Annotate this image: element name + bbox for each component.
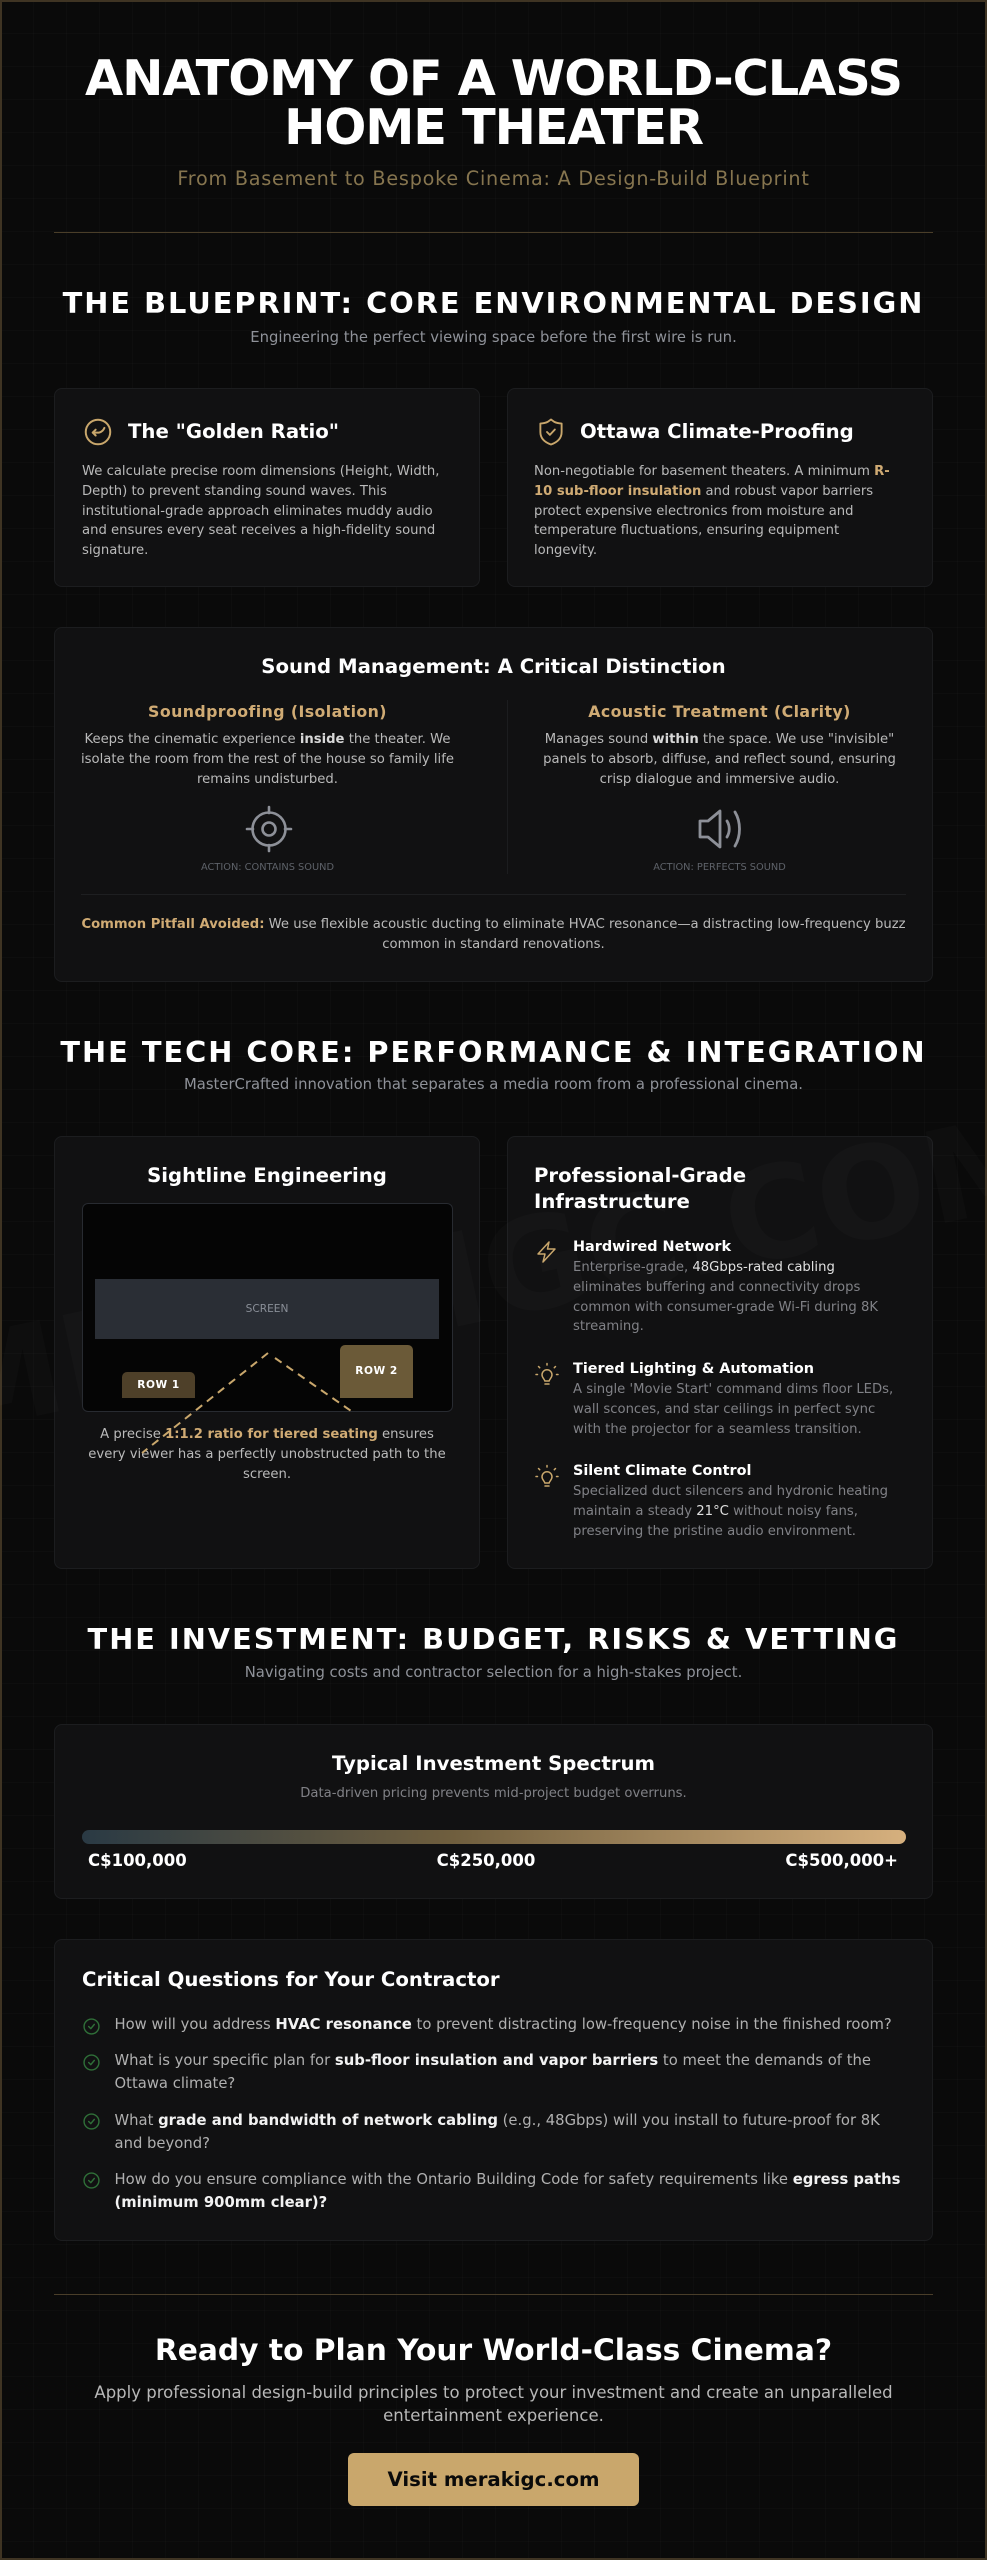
text: climate proofing: longevity. — [534, 543, 597, 558]
icon: check 4 — [83, 2172, 100, 2189]
item title: Silent Climate Control — [573, 1463, 751, 1479]
call to action text: Apply professional design-build principles to protect your investment and create an unparalleled — [94, 2383, 893, 2402]
heading: climate proofing: Ottawa Climate-Proofing — [580, 420, 854, 443]
text: golden ratio: institutional-grade approach eliminates muddy audio — [82, 504, 433, 519]
row 1 seating: ROW 1 — [137, 1379, 180, 1391]
section heading: blueprint: THE BLUEPRINT: CORE ENVIRONMENTAL DESIGN — [63, 286, 924, 320]
text: sightline caption — [88, 1427, 446, 1482]
text: golden ratio: Depth) to prevent standing sound waves. This — [82, 484, 387, 499]
caption: contains sound: ACTION: CONTAINS SOUND — [201, 862, 334, 873]
item text: wall sconces, and star ceilings in perfect sync — [573, 1402, 875, 1417]
item text: streaming. — [573, 1319, 644, 1334]
text: sightline caption: screen. — [243, 1467, 291, 1482]
text: soundproofing — [81, 732, 454, 787]
screen: SCREEN — [246, 1303, 288, 1315]
item text: common with consumer-grade Wi-Fi during 8K — [573, 1300, 878, 1315]
subtitle: From Basement to Bespoke Cinema: A Design-Build Blueprint — [177, 167, 810, 190]
heading: investment spectrum: Typical Investment Spectrum — [332, 1752, 655, 1775]
title — [85, 49, 902, 156]
text: sightline caption: A precise 1:1.2 ratio for tiered seating ensures — [100, 1427, 434, 1442]
item: hardwired network — [537, 1239, 878, 1334]
panel: investment spectrum — [54, 1724, 933, 1899]
item text — [573, 1260, 878, 1334]
text: climate proofing — [534, 464, 890, 558]
item: climate control — [535, 1463, 888, 1539]
item text: A single 'Movie Start' command dims floor LEDs, — [573, 1382, 893, 1397]
text: acoustic treatment: panels to absorb, diffuse, and reflect sound, ensuring — [543, 752, 896, 767]
button: visit website — [348, 2453, 639, 2506]
text: soundproofing: isolate the room from the rest of the house so family life — [81, 752, 454, 767]
item title: Hardwired Network — [573, 1239, 731, 1255]
heading: infrastructure: Professional-Grade — [534, 1164, 746, 1187]
item text — [573, 1484, 888, 1539]
question 3: and beyond? — [114, 2134, 210, 2152]
heading: acoustic treatment: Acoustic Treatment (Clarity) — [588, 702, 851, 721]
heading: sightline: Sightline Engineering — [147, 1164, 387, 1187]
title: HOME THEATER — [284, 98, 703, 156]
question 4: (minimum 900mm clear)? — [114, 2194, 327, 2210]
heading: infrastructure — [534, 1164, 746, 1213]
text: golden ratio: signature. — [82, 543, 148, 558]
screen — [95, 1279, 439, 1339]
text: acoustic treatment: crisp dialogue and immersive audio. — [600, 772, 839, 787]
question 2: What is your specific plan for sub-floor insulation and vapor barriers to meet the demands of the — [114, 2052, 871, 2068]
icon: light bulb — [535, 1362, 559, 1385]
diagram: tiered seating — [82, 1203, 453, 1412]
section subheading: tech core: MasterCrafted innovation that separates a media room from a professional cinema. — [184, 1076, 803, 1093]
question 3: What grade and bandwidth of network cabling (e.g., 48Gbps) will you install to future-proof for 8K — [114, 2112, 880, 2128]
question 4: How do you ensure compliance with the Ontario Building Code for safety requirements like egress paths — [114, 2170, 900, 2188]
item text: eliminates buffering and connectivity drops — [573, 1280, 860, 1295]
section heading: investment: THE INVESTMENT: BUDGET, RISKS & VETTING — [88, 1622, 899, 1656]
call to action text: entertainment experience. — [383, 2406, 604, 2425]
item text: Specialized duct silencers and hydronic heating — [573, 1484, 888, 1499]
text: climate proofing: Non-negotiable for basement theaters. A minimum R- — [534, 464, 890, 479]
panel: climate proofing — [507, 388, 933, 587]
item text: with the projector for a seamless transition. — [573, 1422, 862, 1437]
row 2 seating: ROW 2 — [355, 1365, 398, 1377]
title: ANATOMY OF A WORLD-CLASS — [85, 49, 902, 107]
panel: contractor questions — [54, 1939, 933, 2241]
heading: questions: Critical Questions for Your Contractor — [82, 1968, 500, 1991]
question 2 — [114, 2052, 871, 2092]
heading: infrastructure: Infrastructure — [534, 1190, 690, 1213]
text: climate proofing: protect expensive electronics from moisture and — [534, 504, 853, 519]
question 2: Ottawa climate? — [114, 2074, 235, 2092]
item text: maintain a steady 21°C without noisy fans, — [573, 1504, 858, 1519]
panel: sound management — [54, 627, 933, 982]
text: pricing note: Data-driven pricing prevents mid-project budget overruns. — [300, 1786, 687, 1801]
call to action heading: Ready to Plan Your World-Class Cinema? — [155, 2333, 832, 2368]
panel: infrastructure — [507, 1136, 933, 1569]
panel: sightline engineering — [54, 1136, 480, 1569]
question 4 — [114, 2170, 900, 2210]
icon: golden ratio — [84, 418, 112, 446]
text: climate proofing: 10 sub-floor insulation and robust vapor barriers — [534, 484, 873, 499]
section subheading: blueprint: Engineering the perfect viewing space before the first wire is run. — [250, 329, 737, 346]
section subheading: investment: Navigating costs and contractor selection for a high-stakes project. — [245, 1664, 742, 1681]
text: acoustic treatment: Manages sound within the space. We use "invisible" — [545, 732, 894, 747]
call to action text — [94, 2383, 893, 2425]
icon: light bulb — [535, 1464, 559, 1487]
item: tiered lighting — [535, 1361, 893, 1437]
icon: check 2 — [83, 2054, 100, 2071]
text: golden ratio: and ensures every seat receives a high-fidelity sound — [82, 523, 435, 538]
chart: gradient bar — [82, 1830, 906, 1844]
icon: speaker — [698, 810, 741, 848]
question 3 — [114, 2112, 880, 2152]
caption: perfects sound: ACTION: PERFECTS SOUND — [653, 862, 786, 873]
heading: golden ratio: The "Golden Ratio" — [128, 420, 339, 443]
callout: common pitfall: Common Pitfall Avoided: We use flexible acoustic ducting to eliminate HVAC resonance—a distracting low-frequency buzz — [81, 917, 906, 932]
text: climate proofing: temperature fluctuations, ensuring equipment — [534, 523, 839, 538]
icon: check 3 — [83, 2113, 100, 2130]
callout: common pitfall: common in standard renovations. — [382, 937, 605, 952]
text: sightline caption: every viewer has a perfectly unobstructed path to the — [88, 1447, 446, 1462]
text: golden ratio — [82, 464, 439, 558]
section heading: tech core: THE TECH CORE: PERFORMANCE & INTEGRATION — [60, 1035, 927, 1069]
label: mid price: C$250,000 — [437, 1851, 535, 1870]
item title: Tiered Lighting & Automation — [573, 1361, 814, 1377]
heading: sound management: Sound Management: A Critical Distinction — [261, 655, 726, 678]
text: soundproofing: remains undisturbed. — [197, 772, 338, 787]
label: high price: C$500,000+ — [785, 1851, 898, 1870]
row 2 seating — [340, 1345, 413, 1398]
callout: common pitfall — [81, 917, 906, 952]
label: low price: C$100,000 — [88, 1851, 187, 1870]
panel: golden ratio — [54, 388, 480, 587]
text: golden ratio: We calculate precise room dimensions (Height, Width, — [82, 464, 439, 479]
sightline arrows — [142, 1352, 351, 1454]
text: acoustic treatment — [543, 732, 896, 787]
heading: soundproofing: Soundproofing (Isolation) — [148, 702, 387, 721]
icon: check 1 — [83, 2018, 100, 2035]
question 1: How will you address HVAC resonance to prevent distracting low-frequency noise in the finished room? — [114, 2016, 892, 2032]
text: soundproofing: Keeps the cinematic experience inside the theater. We — [84, 732, 451, 747]
item text: Enterprise-grade, 48Gbps-rated cabling — [573, 1260, 835, 1275]
button: visit website: Visit merakigc.com — [387, 2468, 600, 2491]
icon: target — [246, 806, 292, 852]
icon: shield — [539, 418, 563, 446]
icon: lightning — [537, 1241, 556, 1263]
row 1 seating — [122, 1372, 195, 1398]
item text: preserving the pristine audio environment. — [573, 1524, 856, 1539]
item text — [573, 1382, 893, 1437]
